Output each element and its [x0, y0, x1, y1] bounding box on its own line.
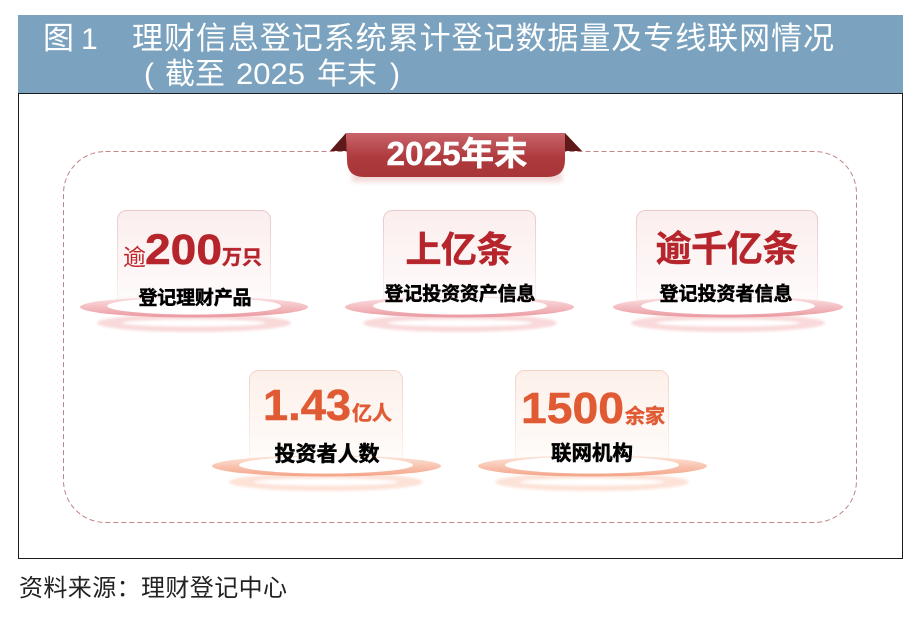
title line 1: 图	[43, 21, 74, 56]
title line 1: 1	[81, 23, 98, 56]
card: 200万只: 登记理财产品	[138, 287, 252, 309]
card: 200万只: 万只	[222, 247, 262, 269]
card: 200万只	[80, 210, 308, 332]
card: 上亿条	[345, 210, 574, 332]
card: 200万只: 200	[145, 226, 222, 274]
title line 2: (	[144, 58, 154, 91]
card: 上亿条: 上亿条	[406, 229, 512, 270]
ribbon: 2025年末: 2025年末	[386, 135, 528, 172]
dashed rounded panel	[64, 152, 856, 522]
header band	[18, 15, 903, 93]
card: 上亿条: 登记投资资产信息	[384, 282, 536, 305]
card: 逾千亿条: 登记投资者信息	[660, 282, 792, 305]
card: 1500余家: 联网机构	[551, 442, 633, 465]
chart frame	[18, 94, 902, 558]
card: 1.43亿人: 投资者人数	[274, 443, 380, 466]
title line 2: 年末	[317, 58, 377, 91]
title line 2: 2025	[236, 58, 305, 91]
title line 2	[144, 58, 400, 91]
title line 2: )	[390, 58, 400, 91]
title line 1: 理财信息登记系统累计登记数据量及专线联网情况	[132, 21, 834, 56]
source note: 资料来源：理财登记中心	[19, 575, 287, 602]
card: 1.43亿人	[212, 370, 441, 491]
card: 1.43亿人: 1.43	[263, 381, 351, 430]
card: 1.43亿人: 亿人	[352, 402, 392, 425]
ribbon: 2025年末	[330, 133, 582, 182]
card: 逾千亿条: 逾千亿条	[656, 228, 798, 269]
card: 1500余家: 余家	[625, 404, 665, 428]
card: 逾千亿条	[613, 210, 843, 332]
card: 200万只: 逾	[123, 244, 146, 270]
card: 1500余家	[478, 370, 707, 491]
card: 1500余家: 1500	[521, 384, 624, 433]
title line 2: 截至	[165, 58, 225, 91]
